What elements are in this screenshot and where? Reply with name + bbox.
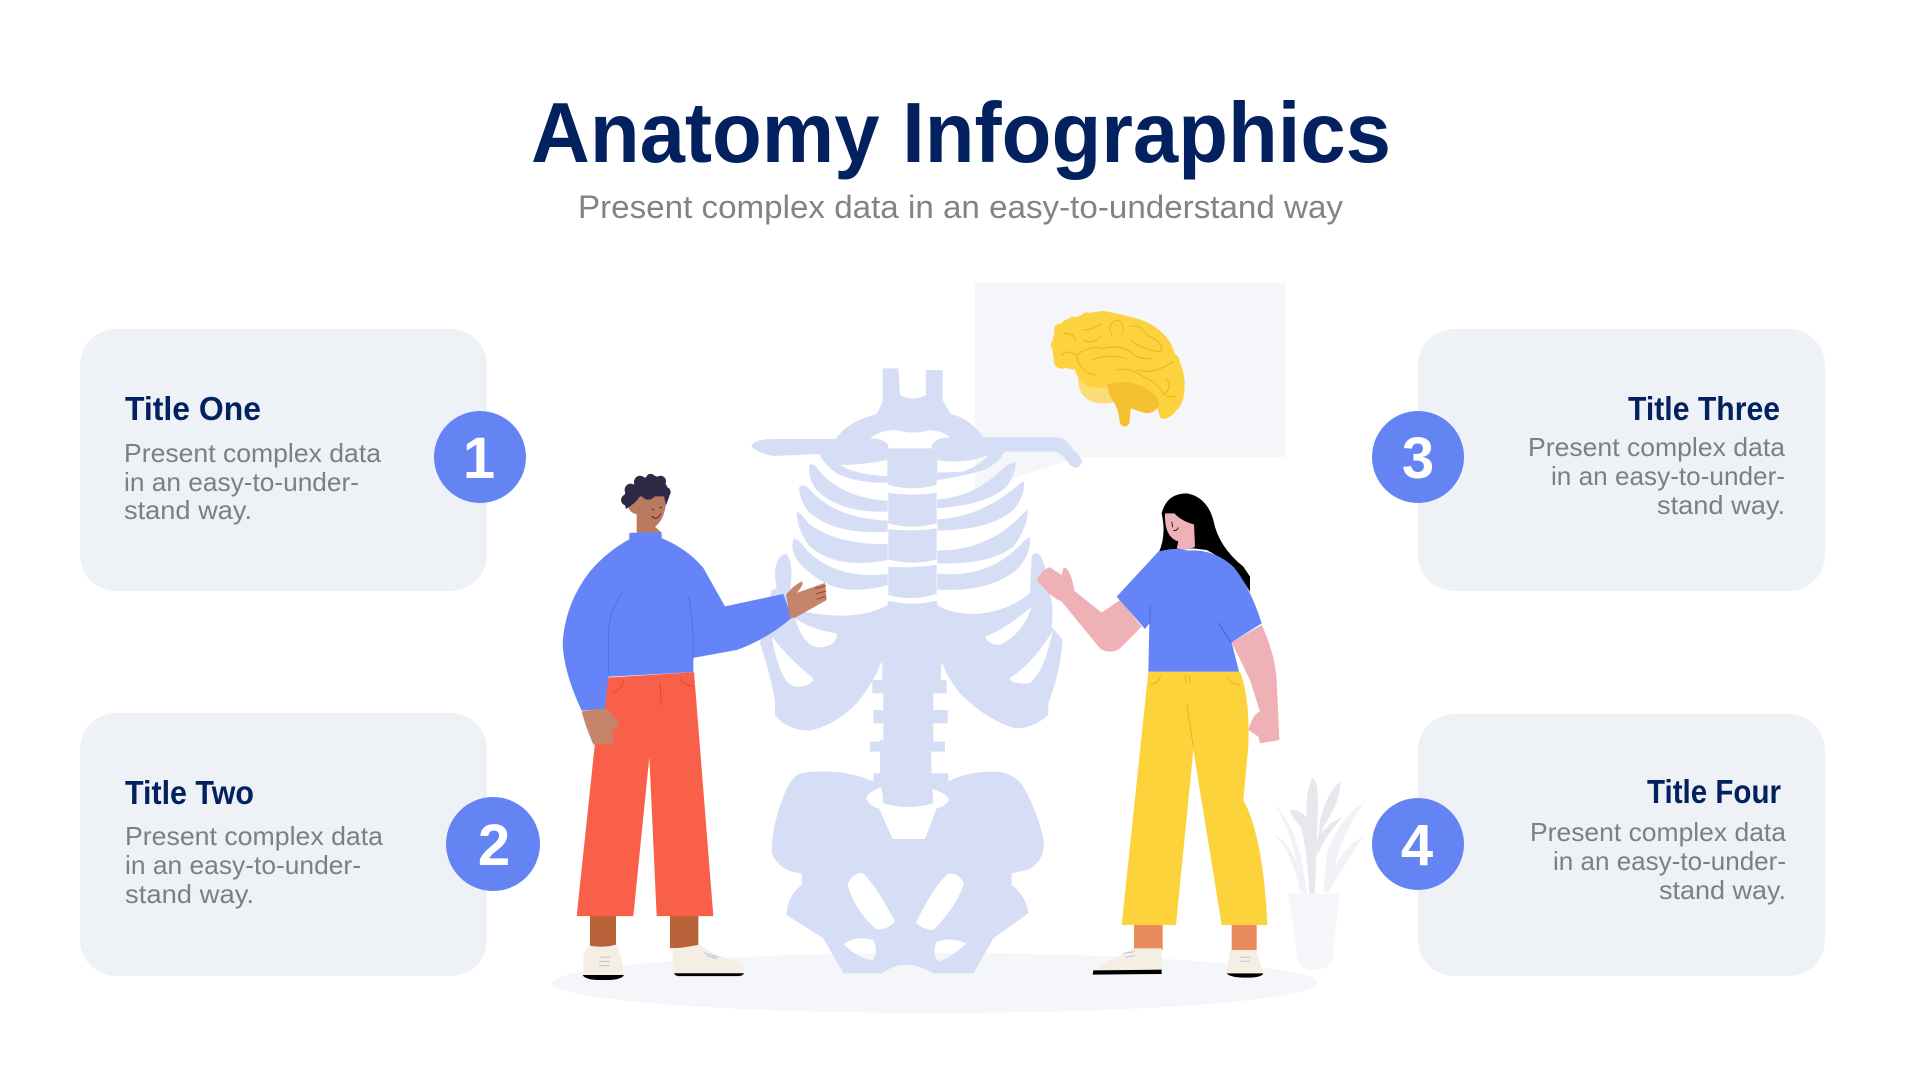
man: sweater — [563, 532, 792, 711]
heading: title three: Title Three — [1628, 390, 1780, 427]
man: hair — [621, 474, 671, 509]
man: hands — [582, 581, 827, 745]
text block: title four body: in an easy-to-under- — [1553, 846, 1786, 876]
icon: brain — [1051, 311, 1184, 427]
panel: title one card — [80, 329, 487, 591]
badge: number 3 — [1372, 411, 1464, 503]
woman: arms — [1037, 567, 1279, 743]
text block: title two body: in an easy-to-under- — [125, 850, 361, 880]
man: trousers — [577, 672, 713, 916]
woman: hair — [1158, 493, 1250, 592]
skeleton illustration — [751, 368, 1082, 973]
badge: number 1: 1 — [463, 426, 495, 491]
panel: title four card — [1418, 714, 1825, 976]
panel: title three card — [1418, 329, 1825, 591]
figure: woman — [1037, 493, 1279, 978]
panel: title two card — [80, 713, 487, 976]
subtitle: Present complex data in an easy-to-understand way — [578, 189, 1343, 225]
text block: title two body: Present complex data — [125, 821, 384, 851]
text block: title four body: stand way. — [1659, 875, 1786, 905]
text block: title four body: Present complex data — [1530, 817, 1787, 847]
man: shoes — [583, 945, 744, 980]
man: head — [627, 487, 667, 533]
woman: fringe — [1166, 495, 1197, 525]
skeleton: ribs and sternum — [792, 448, 1030, 598]
ground ellipse — [552, 953, 1318, 1013]
woman: trousers — [1122, 672, 1267, 925]
skeleton: shoulders and collarbones — [751, 368, 1082, 483]
text block: title one body: in an easy-to-under- — [124, 467, 359, 497]
text block: title two body: stand way. — [125, 879, 254, 909]
skeleton: lower rib cage and lumbar spine — [760, 553, 1063, 752]
plant — [1273, 778, 1365, 970]
text block: title three body: in an easy-to-under- — [1551, 461, 1785, 491]
text block: title three body: stand way. — [1657, 490, 1785, 520]
brain speech panel — [975, 283, 1285, 490]
badge: number 1 — [434, 411, 526, 503]
badge: number 4: 4 — [1401, 813, 1433, 878]
badge: number 3: 3 — [1402, 426, 1434, 491]
heading: title two: Title Two — [125, 774, 254, 811]
heading: title one: Title One — [125, 390, 261, 427]
badge: number 2 — [446, 797, 540, 891]
woman: shirt — [1117, 549, 1262, 672]
figure: man — [563, 474, 827, 980]
text block: title three body: Present complex data — [1528, 432, 1786, 462]
woman: face — [1165, 513, 1195, 550]
heading: title four: Title Four — [1647, 773, 1781, 810]
title: Anatomy Infographics — [531, 86, 1391, 181]
text block: title one body: Present complex data — [124, 438, 382, 468]
text block: title one body: stand way. — [124, 495, 252, 525]
woman: shoes — [1093, 948, 1263, 978]
badge: number 2: 2 — [478, 813, 510, 878]
badge: number 4 — [1372, 798, 1464, 890]
skeleton: pelvis — [772, 740, 1044, 973]
man: legs — [590, 914, 698, 948]
woman: legs — [1134, 923, 1257, 950]
